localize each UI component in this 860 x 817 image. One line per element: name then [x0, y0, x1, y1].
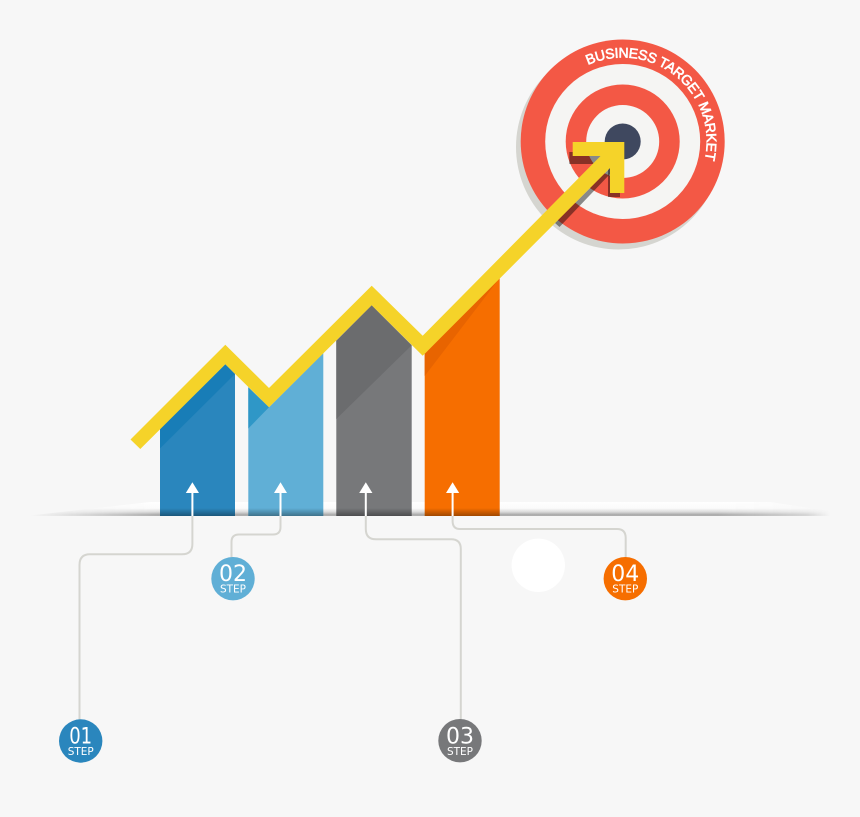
bar: step 1 blue: [160, 364, 235, 516]
bar: step 2 light blue: [248, 353, 323, 516]
badge: step 04: STEP: [612, 582, 639, 596]
arrowhead 1: [186, 482, 199, 493]
connector: step 1: [80, 482, 199, 722]
arrow shadow: [555, 152, 620, 227]
connector: step 4: [446, 482, 626, 560]
badge: step 04: [604, 557, 647, 600]
badge: step 02: [211, 557, 255, 600]
target bullseye: [605, 124, 641, 160]
bar: step 4 orange: [425, 278, 500, 516]
badge: step 01: [59, 719, 102, 763]
connector: step 3: [359, 482, 461, 722]
target outer ring: [521, 40, 725, 244]
curved label: BUSINESS TARGET MARKET: [585, 48, 717, 162]
badge: step 03: [438, 719, 482, 762]
arrowhead 3: [359, 482, 372, 493]
badge: step 04: 04: [611, 562, 639, 587]
connector: step 2: [232, 482, 287, 560]
ground line: [42, 510, 825, 516]
badge: step 01: STEP: [68, 745, 94, 758]
badge: step 02: STEP: [220, 582, 246, 596]
badge: step 03: STEP: [447, 745, 473, 758]
badge: step 01: 01: [69, 724, 92, 750]
badge: step 03: 03: [446, 724, 474, 750]
badge: step 02: 02: [219, 562, 247, 587]
arrowhead 2: [274, 482, 287, 493]
arrowhead 4: [446, 482, 459, 493]
bar: step 3 gray: [336, 305, 412, 516]
panel: target: [516, 40, 725, 250]
decorative white circle: [512, 539, 565, 592]
growth arrow: [130, 142, 624, 449]
target shadow: [516, 44, 721, 250]
